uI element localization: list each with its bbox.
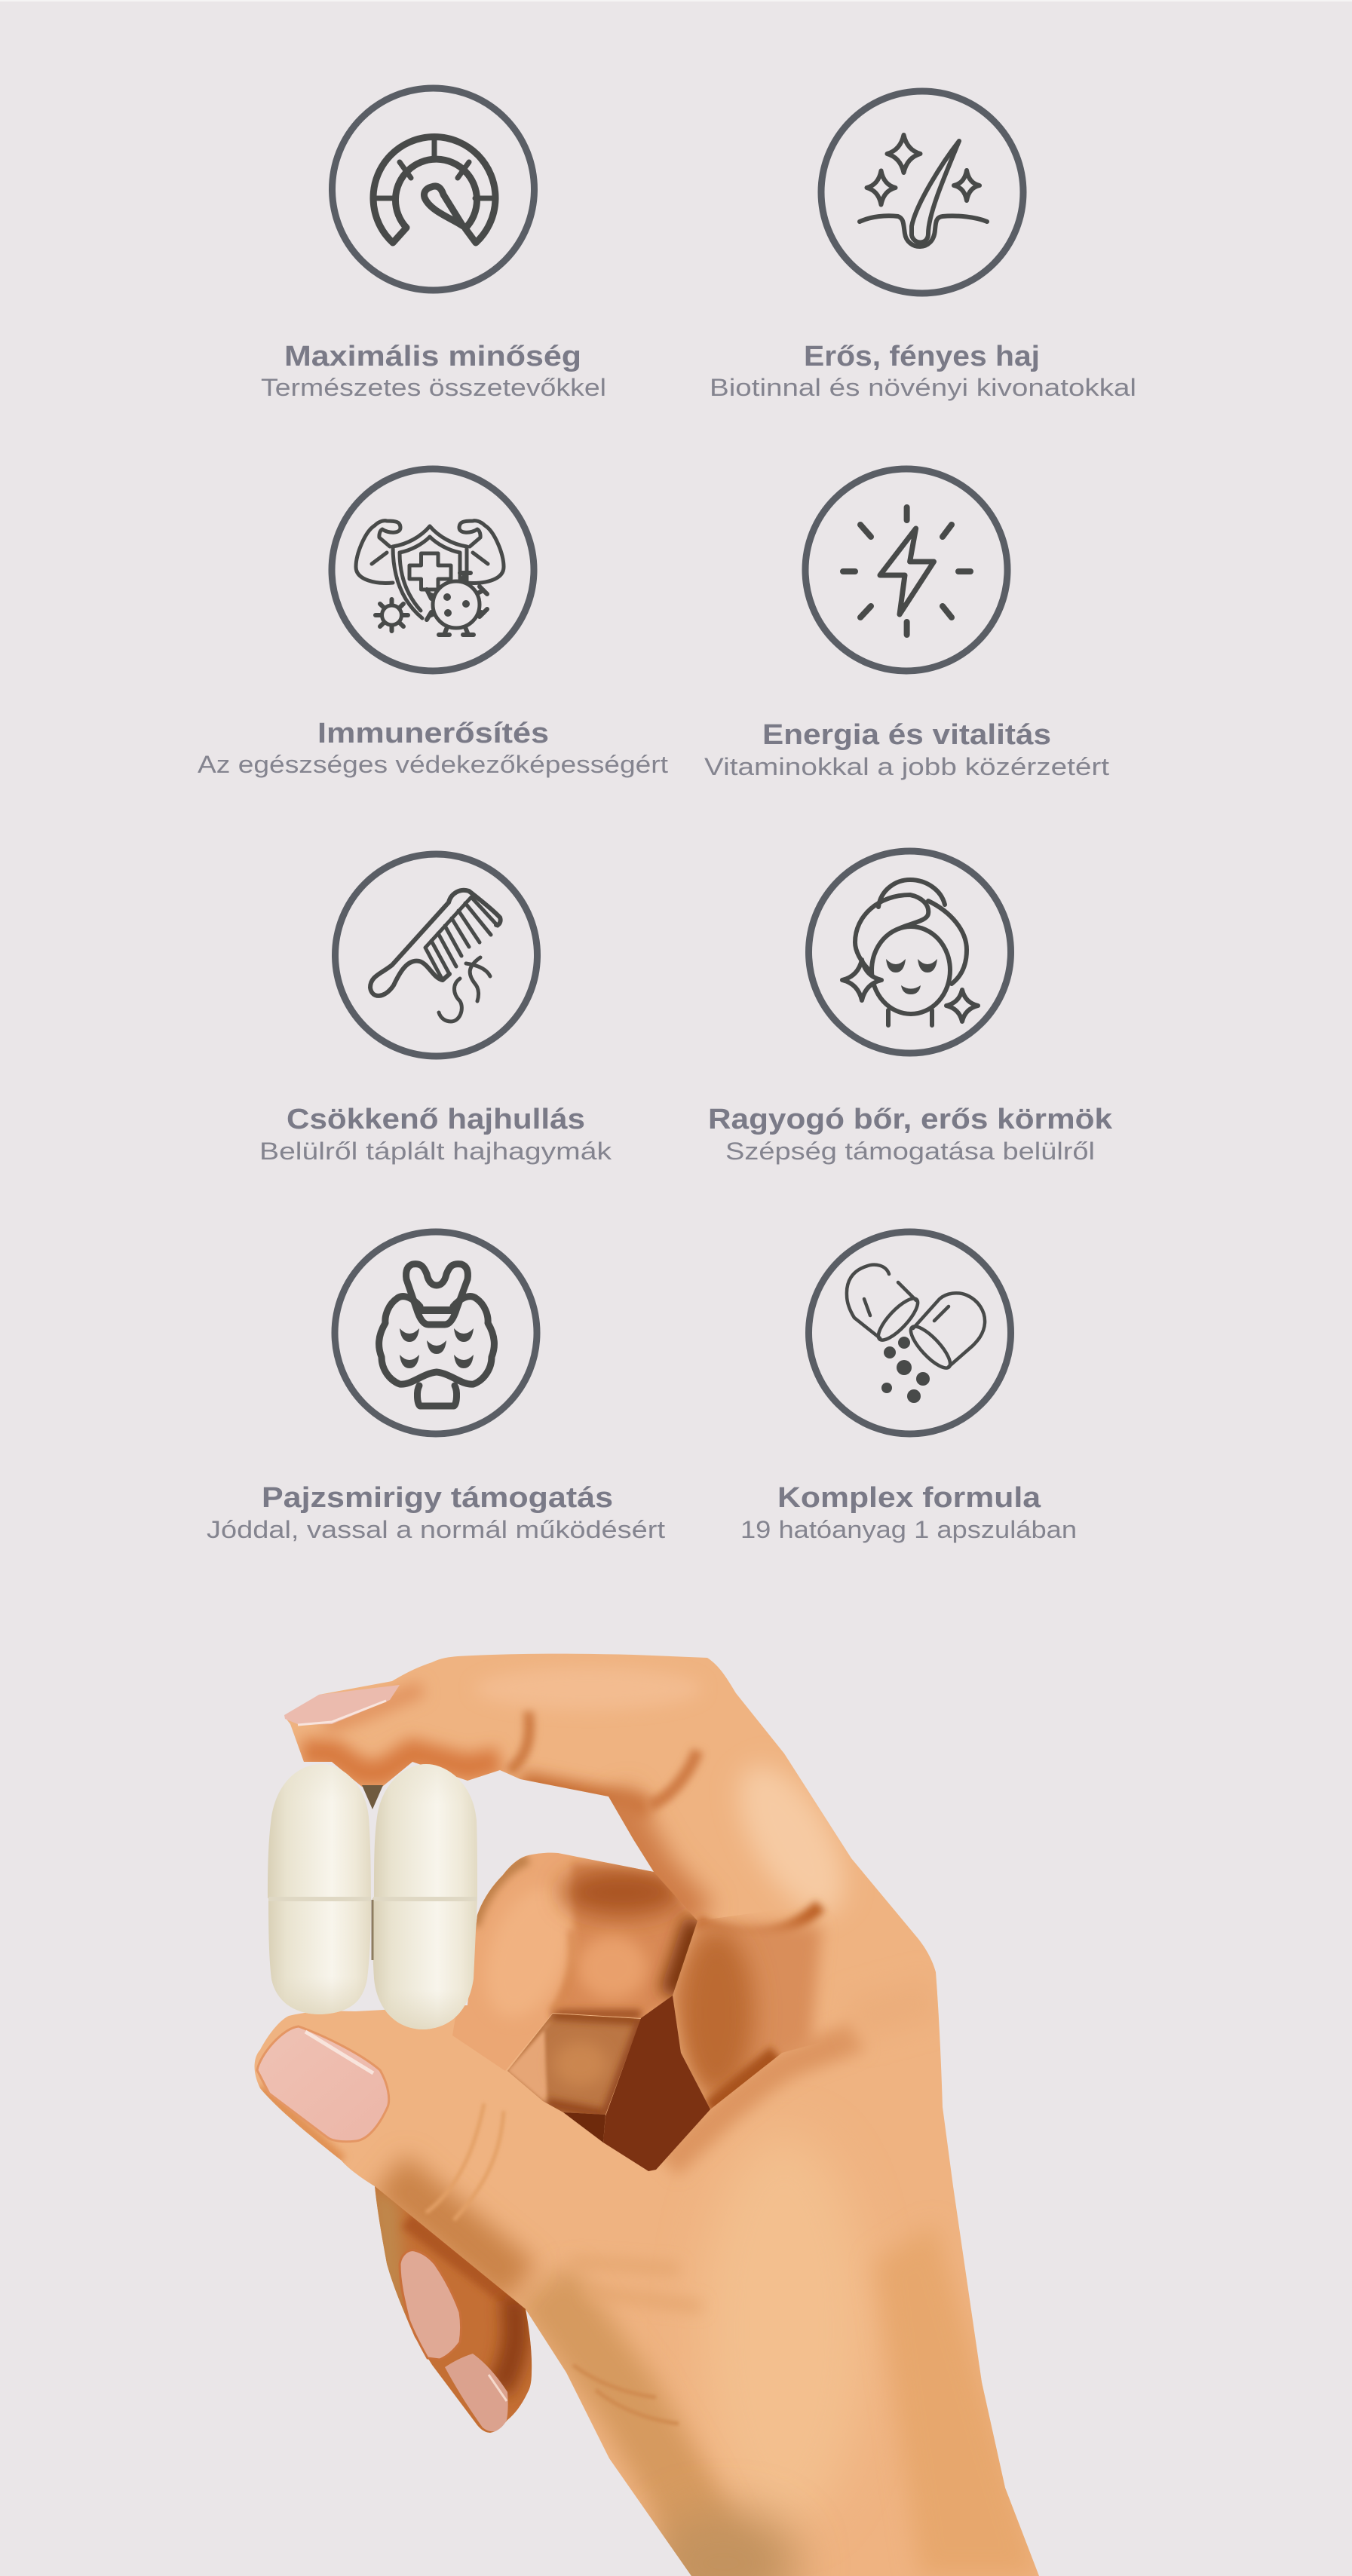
gap line between capsules xyxy=(371,1900,374,1960)
hand holding two capsules xyxy=(241,1643,1056,2576)
heading: Csökkenő hajhullás: Csökkenő hajhullás xyxy=(287,1104,585,1135)
heading: Komplex formula: Komplex formula xyxy=(777,1482,1041,1514)
capsule: right xyxy=(372,1764,477,2029)
text: Az egészséges védekezőképességért: Az egészséges védekezőképességért xyxy=(198,751,668,778)
middle finger xyxy=(452,1853,697,2071)
palm crevice xyxy=(603,1996,710,2171)
ring finger xyxy=(507,2014,641,2115)
icon: gauge in circle xyxy=(332,88,534,290)
icon: comb with hair in circle xyxy=(335,854,537,1056)
web of thumb xyxy=(667,2035,860,2165)
text: Biotinnal és növényi kivonatokkal: Biotinnal és növényi kivonatokkal xyxy=(710,374,1136,401)
thumb shading xyxy=(388,2175,520,2284)
heading: Erős, fényes haj: Erős, fényes haj xyxy=(804,341,1040,372)
shadow between capsules xyxy=(362,1785,383,1809)
text: Vitaminokkal a jobb közérzetért: Vitaminokkal a jobb közérzetért xyxy=(704,753,1109,780)
dark gap under ring finger xyxy=(563,2112,605,2143)
palm xyxy=(673,1921,822,2109)
heading: Maximális minőség: Maximális minőség xyxy=(284,341,581,372)
index finger shading xyxy=(302,1753,500,1773)
icon: thyroid in circle xyxy=(335,1232,537,1434)
heading: Pajzsmirigy támogatás: Pajzsmirigy támogatás xyxy=(262,1482,613,1514)
text: 19 hatóanyag 1 apszulában: 19 hatóanyag 1 apszulában xyxy=(740,1516,1077,1543)
nail: index finger xyxy=(284,1685,400,1725)
nail: thumb xyxy=(257,2026,389,2142)
nail: little finger xyxy=(445,2354,508,2431)
icon: hair follicle in circle xyxy=(821,91,1023,293)
text: Természetes összetevőkkel: Természetes összetevőkkel xyxy=(261,374,606,401)
nail: ring finger xyxy=(400,2250,461,2360)
text: Jóddal, vassal a normál működésért: Jóddal, vassal a normál működésért xyxy=(207,1516,665,1543)
icon: lightning bolt in circle xyxy=(805,469,1007,671)
text: Belülről táplált hajhagymák: Belülről táplált hajhagymák xyxy=(259,1138,612,1165)
icon: immune shield in circle xyxy=(332,469,534,671)
capsule: left xyxy=(268,1764,371,2014)
icon: open capsule in circle xyxy=(808,1232,1010,1434)
text: Szépség támogatása belülről: Szépség támogatása belülről xyxy=(725,1138,1095,1165)
heading: Energia és vitalitás: Energia és vitalitás xyxy=(762,719,1051,751)
icon: woman with towel in circle xyxy=(808,851,1010,1053)
heading: Immunerősítés: Immunerősítés xyxy=(317,718,549,749)
lower fingers xyxy=(375,2186,532,2433)
heading: Ragyogó bőr, erős körmök: Ragyogó bőr, erős körmök xyxy=(708,1104,1113,1135)
